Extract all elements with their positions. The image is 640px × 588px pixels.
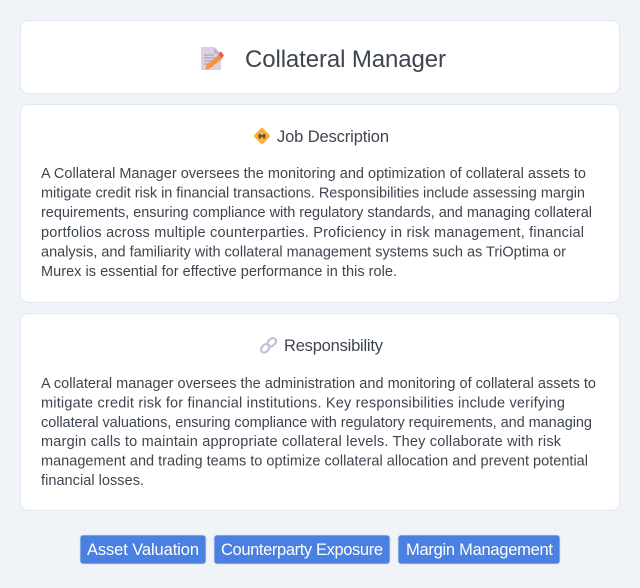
icon: document with pencil — [201, 47, 224, 70]
tag: asset valuation: Asset Valuation — [87, 541, 199, 559]
icon: orange diamond — [253, 127, 271, 145]
tag: margin management — [398, 535, 560, 564]
responsibility paragraph: management and trading teams to optimize collateral allocation and prevent potential — [41, 454, 588, 470]
heading: job description: Job Description — [277, 128, 389, 146]
title text: Collateral Manager — [245, 46, 446, 73]
job description paragraph: Murex is essential for effective performance in this role. — [41, 264, 397, 280]
responsibility paragraph: margin calls to maintain appropriate collateral levels. They collaborate with risk — [41, 434, 562, 450]
tag: counterparty exposure — [214, 535, 390, 564]
job description paragraph: requirements, ensuring compliance with regulatory standards, and managing collateral — [41, 205, 592, 221]
tag: asset valuation — [80, 535, 206, 564]
responsibility paragraph — [41, 376, 596, 489]
heading: responsibility: Responsibility — [284, 337, 384, 355]
job description paragraph: mitigate credit risk in financial transactions. Responsibilities include assessing margin — [41, 186, 585, 202]
tag: margin management: Margin Management — [406, 541, 553, 559]
job description paragraph: analysis, and familiarity with collateral management systems such as TriOptima or — [41, 244, 566, 260]
icon: chain link — [260, 337, 277, 354]
responsibility paragraph: A collateral manager oversees the administration and monitoring of collateral assets to — [41, 376, 596, 392]
responsibility paragraph: mitigate credit risk for financial institutions. Key responsibilities include verifying — [41, 396, 565, 412]
job description paragraph: A Collateral Manager oversees the monitoring and optimization of collateral assets to — [41, 166, 586, 182]
job description paragraph: portfolios across multiple counterparties. Proficiency in risk management, financial — [41, 225, 584, 241]
responsibility paragraph: collateral valuations, ensuring compliance with regulatory requirements, and managing — [41, 415, 592, 431]
tag: counterparty exposure: Counterparty Exposure — [221, 541, 383, 559]
panel: title — [20, 20, 620, 94]
responsibility paragraph: financial losses. — [41, 473, 144, 489]
job description paragraph — [41, 166, 592, 280]
panel: responsibility — [20, 314, 620, 510]
panel: job description — [20, 104, 620, 302]
